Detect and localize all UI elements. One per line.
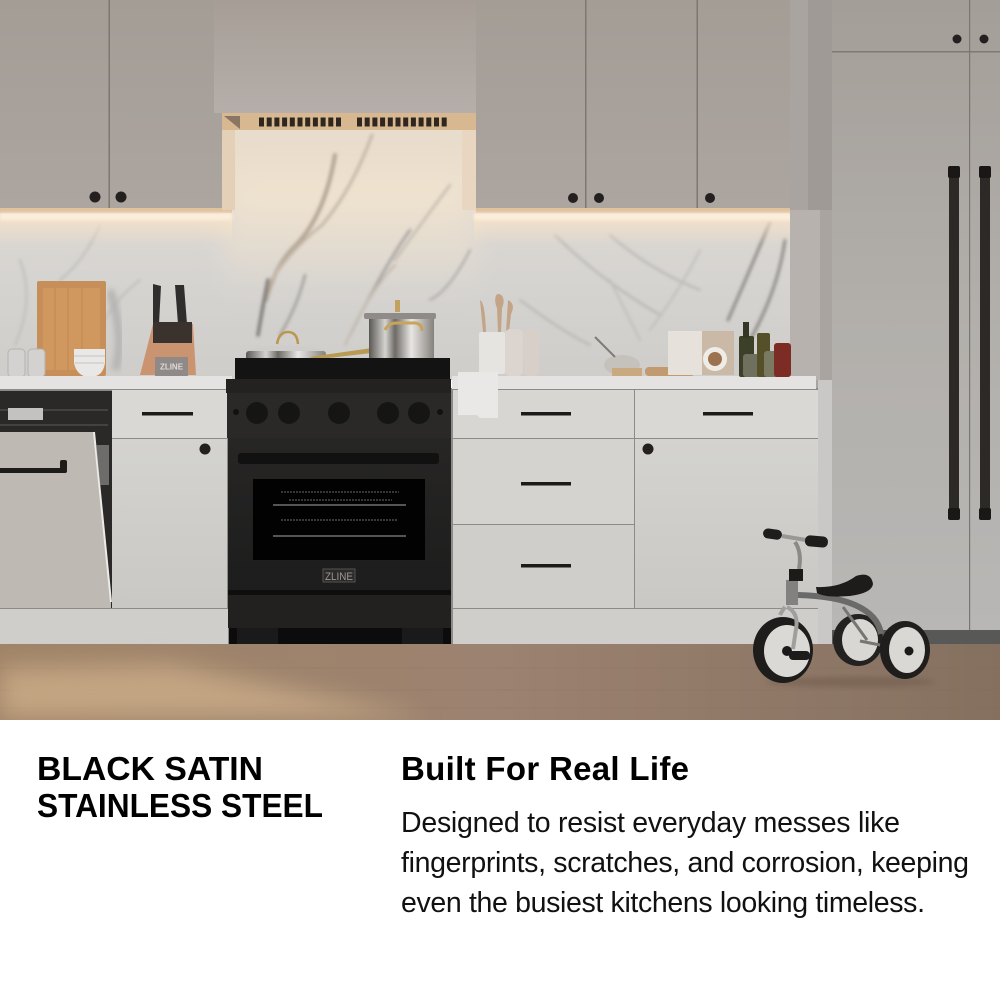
front wheel bbox=[753, 617, 813, 683]
base shadow behind cabinets bbox=[0, 388, 818, 644]
knife block bbox=[140, 284, 196, 376]
body text: fingerprints, scratches, and corrosion, keeping bbox=[401, 847, 969, 879]
oven window bbox=[253, 479, 425, 560]
drawer and feet bbox=[228, 590, 451, 595]
right wheel bbox=[880, 621, 930, 679]
oven door bbox=[228, 438, 451, 590]
heading: black satin stainless steel: STAINLESS STEEL bbox=[37, 787, 323, 824]
floor bbox=[0, 644, 1000, 720]
heading: black satin stainless steel bbox=[37, 750, 323, 824]
cutting board bbox=[37, 281, 106, 376]
cooktop bbox=[235, 358, 450, 379]
dishwasher bbox=[0, 391, 112, 608]
range hood bbox=[214, 0, 477, 210]
marble backsplash bbox=[0, 120, 800, 380]
frame bbox=[798, 595, 881, 634]
middle wheel bbox=[833, 614, 883, 666]
body text bbox=[401, 807, 969, 919]
counter items right bbox=[458, 294, 791, 418]
glasses and bowls bbox=[8, 349, 105, 377]
lower cabinets right bbox=[452, 376, 818, 644]
tricycle bbox=[753, 528, 935, 687]
side end panel bbox=[818, 380, 832, 650]
refrigerator bbox=[832, 0, 1000, 645]
kitchen scene bbox=[0, 0, 1000, 720]
body text: Designed to resist everyday messes like bbox=[401, 807, 900, 839]
side wall bbox=[790, 0, 832, 400]
handlebar bbox=[762, 528, 783, 540]
lower cabinets left bbox=[0, 376, 232, 644]
white caption panel bbox=[0, 720, 1000, 1000]
body text: even the busiest kitchens looking timeless. bbox=[401, 887, 925, 919]
subheading: built for real life: Built For Real Life bbox=[401, 750, 689, 787]
brand badge: ZLINE bbox=[325, 571, 353, 583]
seat bbox=[816, 575, 873, 597]
knife block: ZLINE bbox=[160, 362, 184, 372]
upper cabinets left bbox=[0, 0, 232, 220]
range bbox=[226, 300, 451, 644]
heading: black satin stainless steel: BLACK SATIN bbox=[37, 750, 263, 787]
pots bbox=[246, 300, 436, 366]
upper cabinets right bbox=[474, 0, 808, 220]
control panel bbox=[227, 393, 451, 438]
